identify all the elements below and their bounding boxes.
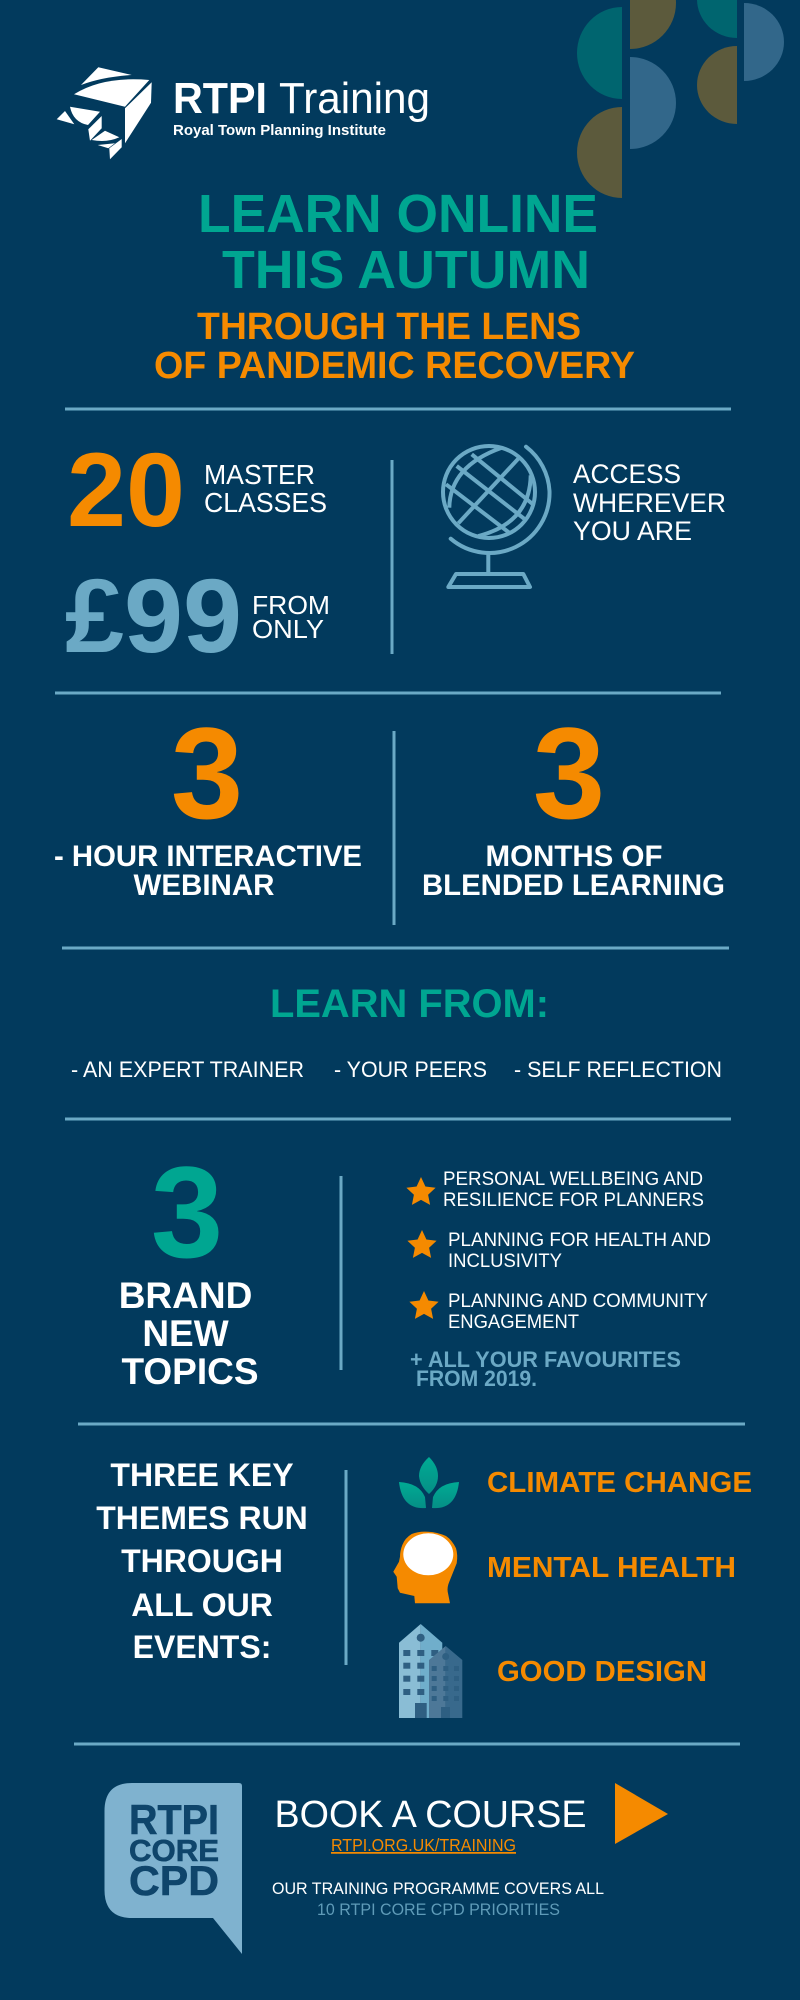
topic: personal wellbeing: RESILIENCE FOR PLANNERS <box>443 1189 704 1211</box>
subtitle: OF PANDEMIC RECOVERY <box>154 345 635 387</box>
logo wordmark: RTPI <box>173 75 267 123</box>
theme: mental health: MENTAL HEALTH <box>487 1552 736 1584</box>
text: three key themes: ALL OUR <box>131 1587 273 1623</box>
panel: topics list <box>406 1168 711 1391</box>
badge: RTPI core CPD: CORE <box>129 1833 219 1868</box>
icon: play arrow <box>615 1783 668 1844</box>
panel: 3 hour webinar <box>54 700 362 902</box>
panel: 3 brand new topics: BRAND <box>119 1275 252 1316</box>
panel: 3 months of blended learning <box>422 700 725 902</box>
topic: personal wellbeing <box>443 1168 704 1211</box>
text: access wherever you are: ACCESS <box>573 459 681 489</box>
text: programme coverage <box>272 1880 604 1919</box>
stat: from only 99 pounds: ONLY <box>252 614 324 644</box>
list: learn from items: - YOUR PEERS <box>334 1057 487 1082</box>
icon: buildings <box>399 1624 462 1718</box>
stat: 20 master classes: 20 <box>67 432 185 549</box>
panel: master classes and price <box>65 432 330 675</box>
note: favourites from 2019 <box>410 1347 681 1391</box>
call to action: book a course: BOOK A COURSE <box>274 1794 586 1836</box>
title: THIS AUTUMN <box>222 240 590 300</box>
theme: good design: GOOD DESIGN <box>497 1656 707 1688</box>
text: three key themes <box>96 1457 308 1665</box>
panel: 3 months of blended learning: 3 <box>533 700 605 846</box>
list: learn from items: - SELF REFLECTION <box>514 1057 722 1082</box>
stat: from only 99 pounds: FROM <box>252 590 330 620</box>
text: access wherever you are: YOU ARE <box>573 516 692 546</box>
subtitle <box>154 306 635 387</box>
panel: 3 brand new topics: 3 <box>151 1139 223 1285</box>
text: three key themes: THREE KEY <box>110 1457 294 1493</box>
text: programme coverage: 10 RTPI CORE CPD PRIORITIES <box>317 1901 560 1919</box>
text: programme coverage: OUR TRAINING PROGRAMME COVERS ALL <box>272 1880 604 1898</box>
title <box>198 184 598 300</box>
icon: globe <box>443 446 550 587</box>
icon: star <box>406 1177 436 1205</box>
icon: head <box>393 1532 457 1603</box>
note: favourites from 2019: FROM 2019. <box>416 1366 537 1391</box>
stat: 20 master classes: MASTER <box>204 459 315 490</box>
subtitle: THROUGH THE LENS <box>197 306 581 348</box>
panel: 3 months of blended learning: MONTHS OF <box>486 840 662 873</box>
topic: health and inclusivity: INCLUSIVITY <box>448 1250 562 1272</box>
logo strapline: Royal Town Planning Institute <box>173 122 386 139</box>
text: three key themes: THEMES RUN <box>96 1500 308 1536</box>
topic: community engagement <box>448 1290 708 1333</box>
note: favourites from 2019: + ALL YOUR FAVOURITES <box>410 1347 681 1372</box>
text: access wherever you are: WHEREVER <box>573 488 726 518</box>
text: access wherever you are <box>573 459 726 546</box>
badge: RTPI core CPD: RTPI <box>129 1796 219 1843</box>
text: three key themes: EVENTS: <box>133 1629 271 1665</box>
logo mark <box>57 67 152 159</box>
decorative half circles <box>577 0 784 198</box>
panel: 3 hour webinar: WEBINAR <box>134 869 274 902</box>
panel: 3 months of blended learning: BLENDED LEARNING <box>422 869 725 902</box>
panel: 3 hour webinar: 3 <box>171 700 243 846</box>
logo: RTPI Training: Training <box>279 75 430 123</box>
stat: 20 master classes <box>67 432 327 549</box>
panel: 3 brand new topics: NEW <box>142 1313 229 1354</box>
stat: from only 99 pounds <box>65 558 330 675</box>
link: training url: RTPI.ORG.UK/TRAINING <box>331 1835 516 1855</box>
icon: star <box>407 1230 437 1258</box>
stat: 20 master classes: CLASSES <box>204 487 327 518</box>
heading: learn from: LEARN FROM: <box>270 982 549 1026</box>
badge: RTPI core CPD <box>104 1783 242 1954</box>
topic: personal wellbeing: PERSONAL WELLBEING AND <box>443 1168 703 1190</box>
topic: health and inclusivity: PLANNING FOR HEALTH AND <box>448 1229 711 1251</box>
list: learn from items: - AN EXPERT TRAINER <box>71 1057 304 1082</box>
panel: 3 hour webinar: - HOUR INTERACTIVE <box>54 840 362 873</box>
list: learn from items <box>71 1057 722 1082</box>
topic: community engagement: PLANNING AND COMMUNITY <box>448 1290 708 1312</box>
badge: RTPI core CPD: CPD <box>129 1857 219 1904</box>
logo: RTPI Training <box>57 67 430 159</box>
title: LEARN ONLINE <box>198 184 598 244</box>
text: three key themes: THROUGH <box>121 1543 283 1579</box>
panel: 3 brand new topics <box>119 1139 259 1392</box>
theme: climate change: CLIMATE CHANGE <box>487 1467 752 1499</box>
stat: from only 99 pounds: £99 <box>65 558 242 675</box>
topic: community engagement: ENGAGEMENT <box>448 1311 579 1333</box>
icon: star <box>409 1291 439 1319</box>
panel: 3 brand new topics: TOPICS <box>121 1351 259 1392</box>
icon: leaves <box>399 1457 459 1508</box>
topic: health and inclusivity <box>448 1229 711 1272</box>
